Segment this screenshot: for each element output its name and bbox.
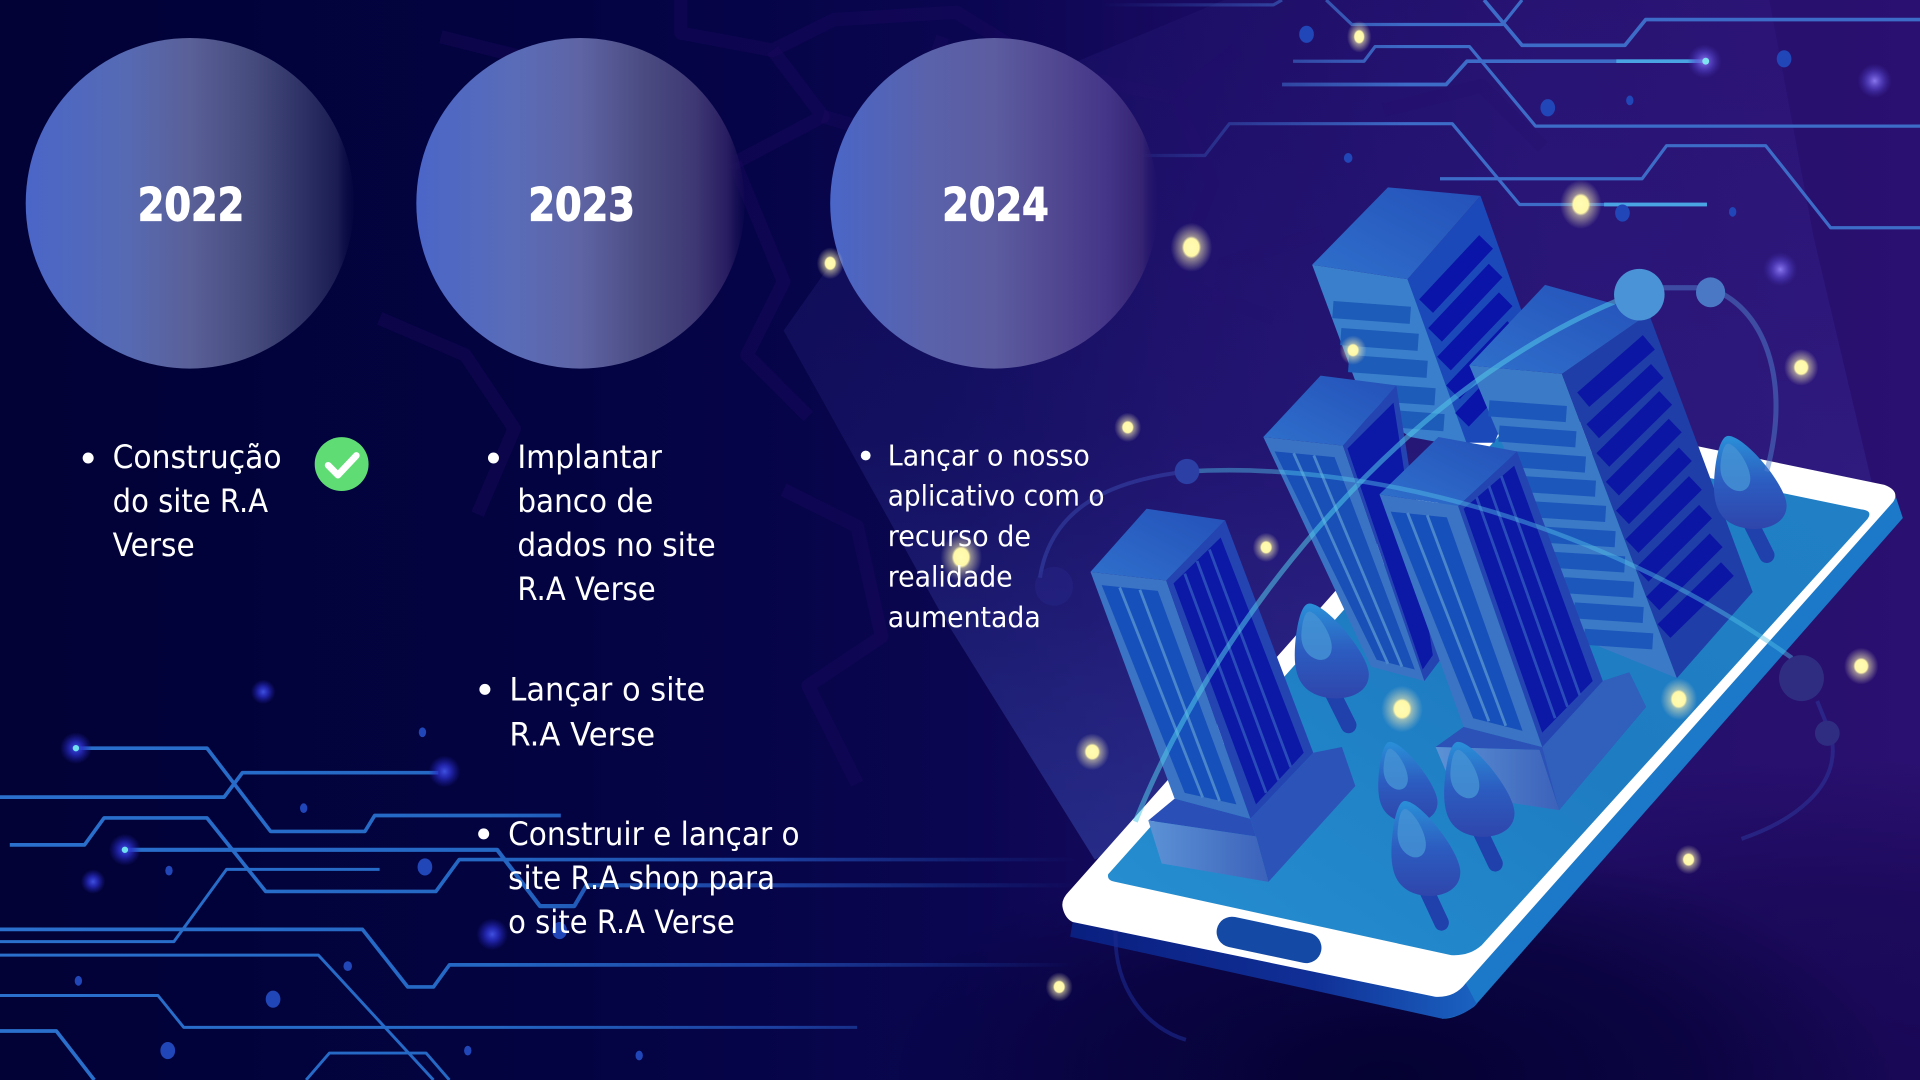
- text: 2024 goal: Lançar o nosso: [888, 438, 1090, 472]
- icon: green check: [315, 437, 369, 491]
- light beam above phone: [784, 0, 1873, 860]
- circle: 2023: [416, 38, 744, 369]
- text: 2023 goal, database: Implantar: [517, 438, 663, 476]
- text: 2022 goals: [83, 438, 282, 564]
- trees: [1295, 436, 1787, 923]
- city illustration: [1035, 187, 1840, 1040]
- bright circuit terminals top right: [1604, 61, 1707, 204]
- text: 2024 goal: realidade: [888, 560, 1013, 594]
- text: 2022 goals: Construção: [113, 438, 282, 476]
- text: 2023 goal, shop: site R.A shop para: [508, 859, 775, 897]
- building: middle left tower: [1263, 376, 1440, 681]
- circle: 2024: [830, 38, 1158, 369]
- text: 2023 goal, launch site: R.A Verse: [509, 716, 655, 754]
- text: 2023 goal, shop: [478, 815, 800, 941]
- glowing yellow lights: [817, 21, 1878, 1002]
- text: 2024 goal: aplicativo com o: [888, 479, 1104, 513]
- circle: 2022: 2022: [138, 178, 244, 231]
- text: 2023 goal, launch site: Lançar o site: [509, 670, 705, 708]
- text: 2023 goal, database: banco de: [517, 482, 653, 520]
- circuit lines: top right: [1000, 0, 1920, 228]
- orbit arcs and nodes: [1035, 269, 1840, 1040]
- text: 2024 goal: recurso de: [888, 519, 1031, 553]
- text: 2023 goal, database: [488, 438, 716, 608]
- honeycomb background pattern: [380, 0, 1543, 784]
- text: 2022 goals: do site R.A: [113, 482, 268, 520]
- building: center tower: [1379, 437, 1646, 810]
- circle: 2022: [26, 38, 354, 369]
- phone body: [1062, 405, 1903, 1019]
- circle: 2023: 2023: [528, 178, 635, 231]
- building: back tower: [1312, 187, 1534, 449]
- circuit lines: bottom left: [0, 748, 1102, 1080]
- building: tall right tower: [1469, 285, 1753, 678]
- text: 2024 goal: [861, 438, 1104, 634]
- text: 2023 goal, shop: o site R.A Verse: [508, 903, 735, 941]
- building: front left tower: [1090, 509, 1355, 882]
- circle: 2024: 2024: [942, 178, 1049, 231]
- text: 2023 goal, database: dados no site: [517, 526, 716, 564]
- text: 2023 goal, launch site: [479, 670, 705, 754]
- text: 2024 goal: aumentada: [888, 600, 1041, 634]
- text: 2023 goal, database: R.A Verse: [517, 570, 656, 608]
- text: 2023 goal, shop: Construir e lançar o: [508, 815, 800, 853]
- text: 2022 goals: Verse: [113, 526, 195, 564]
